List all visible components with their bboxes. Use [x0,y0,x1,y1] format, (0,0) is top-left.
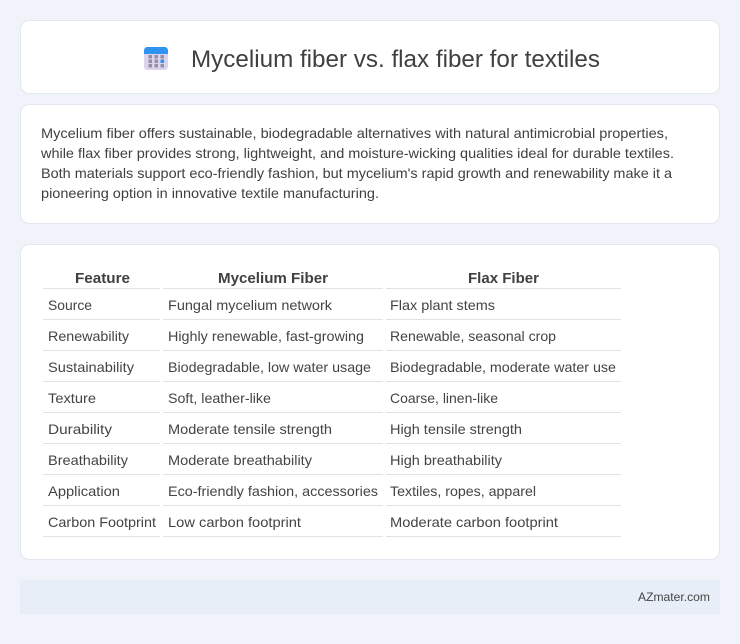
table row: application: Eco-friendly fashion, accessories [168,483,378,499]
text block: summary paragraph [40,125,674,201]
footer bar [20,580,720,614]
table row: application: Textiles, ropes, apparel [390,483,536,499]
table row: sustainability: Biodegradable, low water usage [168,359,371,375]
table row: carbon footprint: Moderate carbon footprint [390,514,558,530]
table row: source: Fungal mycelium network [168,297,333,313]
table row: durability: Moderate tensile strength [168,421,332,437]
table row: durability: High tensile strength [390,421,522,437]
panel: header [20,20,720,94]
table row: carbon footprint [48,514,558,530]
table row: breathability: Breathability [48,452,128,468]
table row: sustainability: Biodegradable, moderate water use [390,359,616,375]
table header row [75,270,539,287]
table row: texture: Coarse, linen-like [390,390,498,406]
table row: renewability: Renewable, seasonal crop [390,328,556,344]
text block: summary paragraph: while flax fiber provides strong, lightweight, and moisture-wicking qualities ideal for durable textiles. [40,145,674,161]
text block: summary paragraph: Mycelium fiber offers sustainable, biodegradable alternatives with natural antimicrobial properties, [41,125,668,141]
table row: texture [48,390,498,406]
table row: sustainability: Sustainability [48,359,134,375]
table row: renewability: Highly renewable, fast-growing [168,328,364,344]
table row: texture: Texture [48,390,96,406]
table row: durability [48,421,522,437]
table row: breathability: High breathability [390,452,502,468]
table row: breathability: Moderate breathability [168,452,312,468]
table row: carbon footprint: Carbon Footprint [48,514,156,530]
table row: application: Application [48,483,120,499]
table row: source: Flax plant stems [390,297,495,313]
table row: application [48,483,536,499]
table header row: Mycelium Fiber [218,270,328,287]
icon: calendar [144,47,168,70]
table row: sustainability [48,359,616,375]
table header row: Feature [75,270,130,287]
table row: texture: Soft, leather-like [168,390,271,406]
table row: source: Source [48,297,92,313]
table row: source [48,297,495,313]
table row: durability: Durability [48,421,112,437]
title: Mycelium fiber vs. flax fiber for textiles [191,46,600,73]
table row: breathability [48,452,502,468]
text block: summary paragraph: Both materials support eco-friendly fashion, but mycelium's rapid growth and renewability make it a [41,165,672,181]
panel: comparison table [20,244,720,560]
table row: carbon footprint: Low carbon footprint [168,514,301,530]
table header row: Flax Fiber [468,270,539,287]
text block: summary paragraph: pioneering option in innovative textile manufacturing. [41,185,379,201]
footer credit: AZmater.com [638,590,710,604]
table row: renewability: Renewability [48,328,129,344]
panel: summary [20,104,720,224]
table row: renewability [48,328,556,344]
